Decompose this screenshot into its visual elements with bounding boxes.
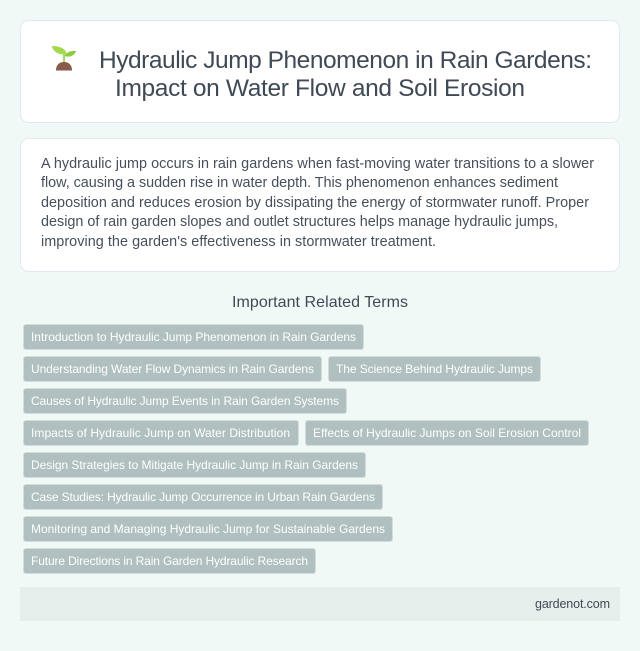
tag: Understanding Water Flow Dynamics in Rain Gardens [31,362,314,376]
tag [306,420,588,446]
panel: description [20,138,620,272]
title [99,47,592,102]
description text: A hydraulic jump occurs in rain gardens when fast-moving water transitions to a slower [41,156,594,172]
tag [24,484,382,510]
related terms tags [24,324,588,574]
description text: improving the garden's effectiveness in stormwater treatment. [41,234,436,250]
tag: Future Directions in Rain Garden Hydraulic Research [31,554,308,568]
tag: Introduction to Hydraulic Jump Phenomenon in Rain Gardens [31,330,356,344]
description text: design of rain garden slopes and outlet structures helps manage hydraulic jumps, [41,214,558,230]
description text: deposition and reduces erosion by dissipating the energy of stormwater runoff. Proper [41,195,589,211]
description text [41,156,594,250]
tag: Monitoring and Managing Hydraulic Jump for Sustainable Gardens [31,522,385,536]
tag: Causes of Hydraulic Jump Events in Rain Garden Systems [31,394,339,408]
tag [24,548,316,574]
tag [24,324,364,350]
footer [20,587,620,621]
icon: seedling [52,46,76,70]
footer source: gardenot.com [535,597,610,611]
tag [24,356,322,382]
title: Impact on Water Flow and Soil Erosion [115,75,525,102]
tag [24,420,298,446]
tag: The Science Behind Hydraulic Jumps [336,362,533,376]
heading: related terms: Important Related Terms [232,294,408,311]
description text: flow, causing a sudden rise in water depth. This phenomenon enhances sediment [41,175,558,191]
tag: Impacts of Hydraulic Jump on Water Distribution [31,426,290,440]
tag [328,356,540,382]
tag: Effects of Hydraulic Jumps on Soil Erosion Control [313,426,581,440]
tag [24,452,366,478]
title: Hydraulic Jump Phenomenon in Rain Gardens: [99,47,592,74]
tag: Design Strategies to Mitigate Hydraulic Jump in Rain Gardens [31,458,358,472]
tag: Case Studies: Hydraulic Jump Occurrence in Urban Rain Gardens [31,490,375,504]
panel: title card [20,20,620,122]
tag [24,516,392,542]
tag [24,388,346,414]
